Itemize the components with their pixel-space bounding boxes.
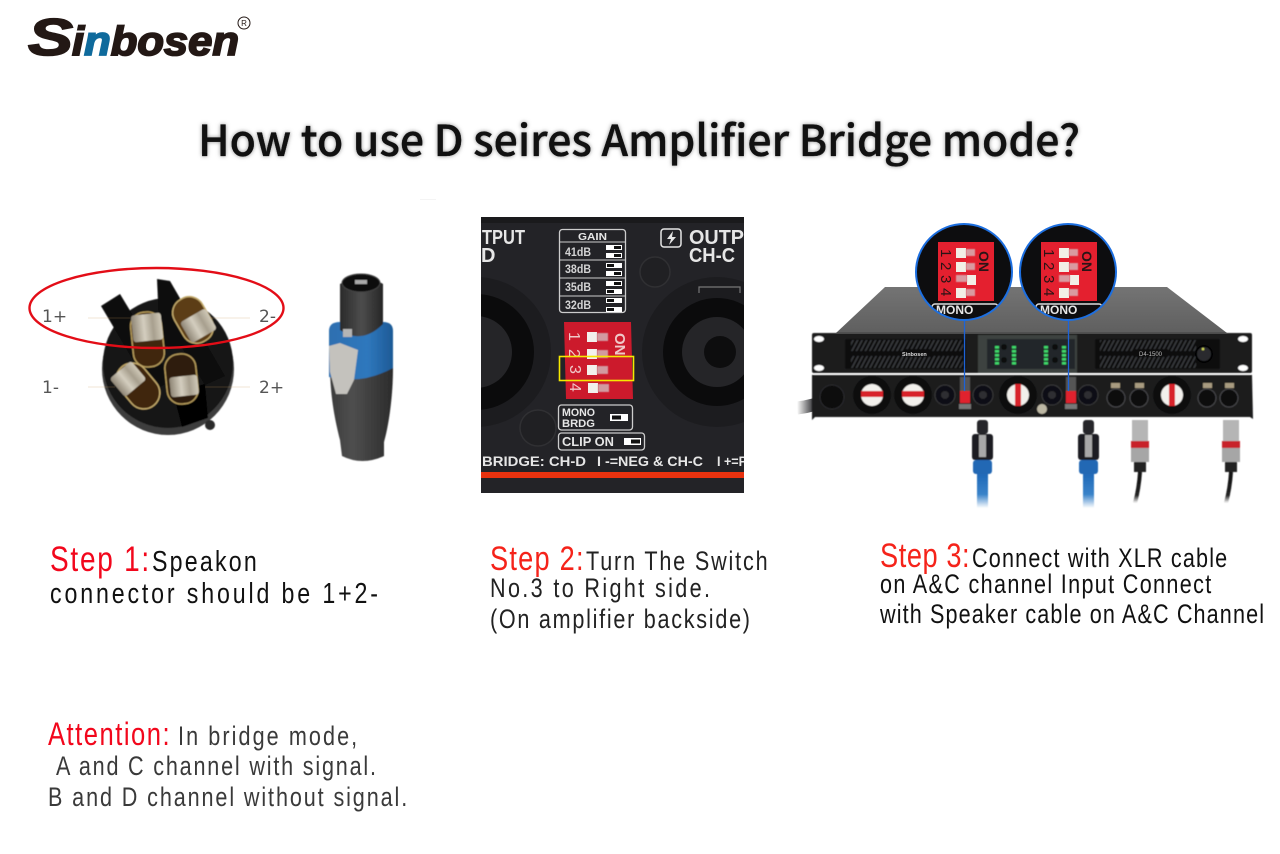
- yellow highlight: [560, 356, 634, 380]
- attention text: A and C channel with signal.: [56, 752, 376, 782]
- output labels: OUTP: [689, 227, 744, 249]
- magnifier left: DIP switch: 1: [937, 249, 954, 257]
- mono bridge label: MONO: [562, 407, 595, 419]
- red ellipse highlight: [30, 268, 284, 348]
- red DIP switch: 2: [565, 349, 582, 358]
- title: How to use D seires Amplifier Bridge mode?: [198, 107, 1080, 169]
- logo: Sinbosen: R: [241, 19, 247, 28]
- mono bridge label: BRDG: [562, 418, 595, 430]
- step 2 text: Step 2:: [490, 539, 584, 578]
- gain table: GAIN: [578, 231, 607, 243]
- right speakon socket: [642, 278, 744, 426]
- output labels: TPUT: [482, 227, 525, 249]
- red DIP switch: 1: [565, 332, 582, 341]
- rear panel: [812, 374, 1253, 420]
- clip on label: [558, 433, 644, 450]
- connector face: [101, 279, 234, 435]
- panel: amplifier rear switch photo: [481, 217, 744, 493]
- step 2 text: Turn The Switch: [586, 547, 768, 577]
- step 3 text: Step 3:: [880, 536, 970, 575]
- magnifier left: DIP switch: MONO: [936, 303, 973, 317]
- red DIP switch: 3: [566, 365, 583, 374]
- red DIP switch: 4: [566, 383, 583, 392]
- gain table: 35dB: [565, 282, 591, 294]
- gain table: [560, 230, 626, 312]
- front panel: [812, 333, 1252, 373]
- pin labels: 2-: [259, 307, 276, 327]
- output labels: CH-C: [689, 245, 735, 267]
- amplifier top: [836, 287, 1227, 333]
- speakon cable left: [972, 420, 993, 508]
- clip on label: CLIP ON: [562, 435, 614, 449]
- magnifier right: DIP switch: 2: [1040, 262, 1057, 270]
- magnifier right: DIP switch: ON: [1079, 251, 1095, 272]
- speakon plug: [329, 274, 393, 461]
- bridge caption: I -=NEG & CH-C: [597, 454, 703, 469]
- magnifier left: DIP switch: 4: [937, 288, 954, 296]
- gain table: 32dB: [565, 300, 591, 312]
- attention text: B and D channel without signal.: [48, 783, 407, 813]
- step 2 text: (On amplifier backside): [490, 605, 750, 635]
- attention text: Attention:: [48, 717, 170, 753]
- step 1 text: [50, 539, 378, 610]
- bridge caption: BRIDGE: CH-D: [482, 454, 586, 469]
- guide lines: [88, 318, 250, 387]
- red stripe: [481, 472, 744, 478]
- panel: speakon connector photos: [30, 268, 393, 461]
- blue pointer lines: [964, 319, 1068, 391]
- bridge caption: I +=P: [717, 454, 747, 469]
- magnifier right: DIP switch: 1: [1040, 249, 1057, 257]
- pin 1+: [129, 310, 166, 368]
- magnifier right: DIP switch: 4: [1040, 288, 1057, 296]
- pin 2+: [163, 352, 200, 405]
- step 1 text: Step 1:: [50, 539, 149, 579]
- pin labels: 1-: [42, 378, 59, 398]
- pin 2-: [167, 291, 219, 349]
- screws: [520, 257, 670, 446]
- step 2 text: [490, 539, 768, 635]
- step 1 text: connector should be 1+2-: [50, 576, 378, 610]
- left speakon socket: [481, 278, 550, 426]
- pin 1-: [110, 357, 166, 415]
- panel: amplifier with cables: Sinbosen: [902, 352, 927, 358]
- mono bridge label: [558, 405, 632, 430]
- XLR cable right: [1222, 420, 1240, 503]
- magnifier right: DIP switch: 3: [1040, 275, 1057, 283]
- step 2 text: No.3 to Right side.: [490, 574, 710, 604]
- output labels: D: [481, 245, 495, 267]
- title: How to use D seires Amplifier Bridge mode?: [198, 107, 1080, 169]
- magnifier right: DIP switch: MONO: [1040, 303, 1077, 317]
- step 1 text: Speakon: [152, 544, 257, 578]
- step 3 text: on A&C channel Input Connect: [880, 570, 1211, 600]
- power cable: [797, 398, 832, 408]
- magnifier right: DIP switch: [1020, 224, 1116, 326]
- step 3 text: with Speaker cable on A&C Channel: [879, 600, 1264, 630]
- magnifier left: DIP switch: ON: [976, 251, 992, 272]
- magnifier left: DIP switch: 2: [937, 262, 954, 270]
- output labels: [482, 228, 744, 262]
- pin labels: 1+: [42, 307, 67, 327]
- attention text: In bridge mode,: [178, 722, 357, 752]
- magnifier left: DIP switch: [916, 224, 1012, 326]
- logo: Sinbosen: inbosen: [72, 18, 239, 64]
- pin labels: 2+: [259, 378, 284, 398]
- XLR cable left: [1131, 420, 1149, 503]
- red DIP switch: ON: [611, 333, 628, 356]
- speakon cable right: [1078, 420, 1099, 508]
- step 3 text: [879, 536, 1264, 630]
- panel: amplifier with cables: D4-1500: [1139, 352, 1163, 358]
- gain table: 41dB: [565, 247, 591, 259]
- bridge caption: [483, 456, 744, 466]
- logo: Sinbosen: [28, 9, 250, 67]
- pin labels: [42, 307, 284, 398]
- red DIP switch: [564, 322, 633, 399]
- gain table: 38dB: [565, 264, 591, 276]
- logo: Sinbosen: S: [28, 9, 73, 67]
- attention text: [48, 717, 407, 813]
- panel: amplifier with cables: [797, 224, 1253, 508]
- step 3 text: Connect with XLR cable: [972, 544, 1227, 574]
- magnifier left: DIP switch: 3: [937, 275, 954, 283]
